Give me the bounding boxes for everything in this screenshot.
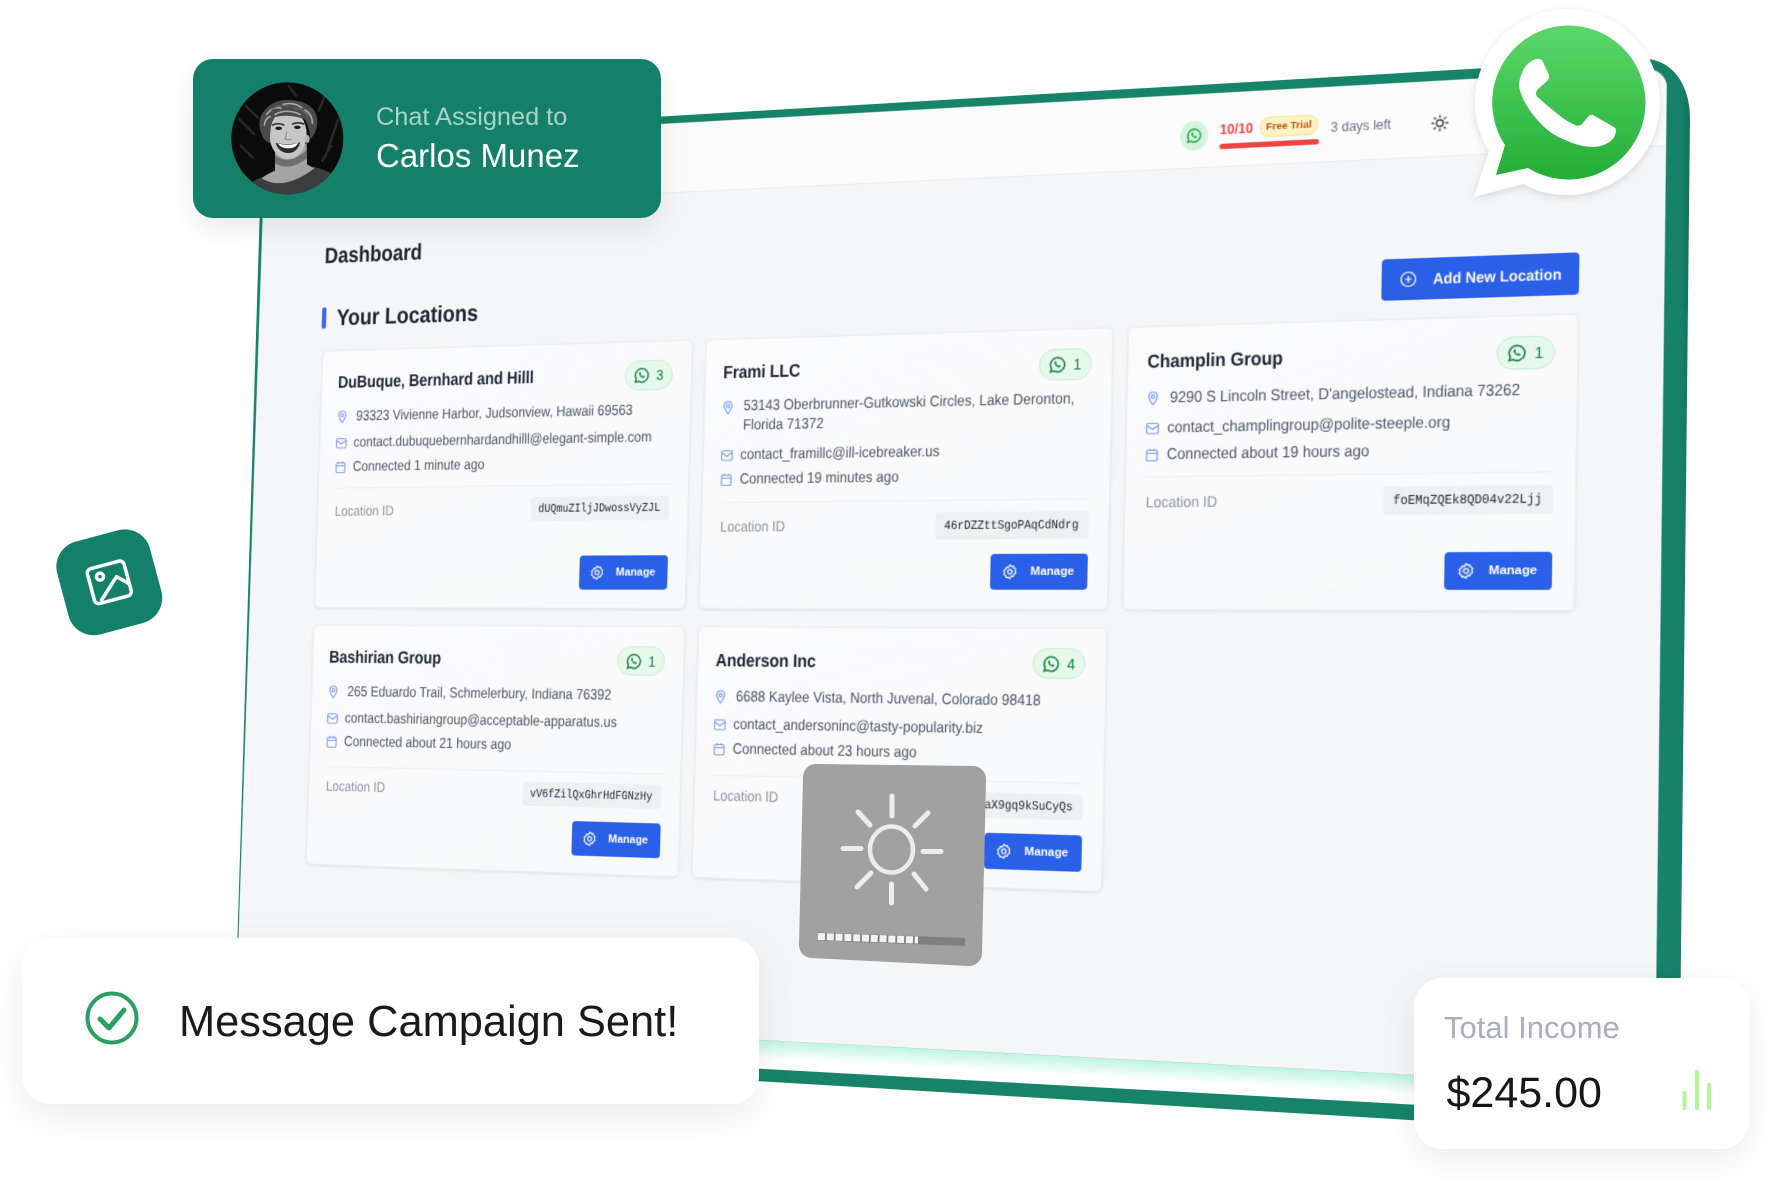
address: 53143 Oberbrunner-Gutkowski Circles, Lake Deronton, <box>743 391 1075 414</box>
location id label: Location ID <box>720 518 785 535</box>
whatsapp count badge: 1 <box>648 653 656 670</box>
email: contact.bashiriangroup@acceptable-apparatus.us <box>345 711 617 731</box>
header bar <box>263 68 1667 213</box>
assignee name: Carlos Munez <box>376 136 580 174</box>
email: contact_framillc@ill-icebreaker.us <box>740 444 940 463</box>
manage button <box>571 821 661 858</box>
dashboard screen <box>236 68 1667 1088</box>
card title: Champlin Group <box>1147 347 1283 372</box>
panel: location card Frami <box>699 327 1113 610</box>
location id value <box>1383 485 1553 515</box>
quota bar <box>1219 139 1319 149</box>
panel: location card DuBuque <box>314 340 693 609</box>
card: message campaign sent <box>22 938 759 1104</box>
email: contact_andersoninc@tasty-popularity.biz <box>733 717 983 737</box>
manage button <box>984 833 1082 872</box>
card: total income <box>1414 978 1749 1149</box>
manage button: Manage <box>1030 565 1074 578</box>
whatsapp count badge <box>1032 648 1086 679</box>
income amount: $245.00 <box>1446 1069 1602 1117</box>
icon: check circle <box>86 992 138 1044</box>
whatsapp status icon <box>1180 120 1208 151</box>
location id value <box>935 511 1089 540</box>
email: contact.dubuquebernhardandhilll@elegant-simple.com <box>353 429 652 451</box>
whatsapp count badge <box>1496 335 1555 370</box>
manage button: Manage <box>608 833 648 847</box>
location id value <box>530 496 670 521</box>
email: contact_champlingroup@polite-steeple.org <box>1167 414 1450 437</box>
location id value: bT2mLpQaX9gq9kSuCyQs <box>938 797 1073 815</box>
connected time: Connected about 19 hours ago <box>1167 443 1369 463</box>
icon: whatsapp logo <box>1472 8 1662 200</box>
address: Florida 71372 <box>743 416 824 434</box>
address <box>723 391 1075 434</box>
panel: location card Champlin <box>1122 314 1579 611</box>
income label: Total Income <box>1444 1010 1620 1045</box>
icon: image badge <box>56 529 162 636</box>
message text: Message Campaign Sent! <box>179 998 678 1046</box>
mini bar chart <box>1682 1070 1711 1110</box>
location id value <box>929 791 1083 820</box>
days left: 3 days left <box>1331 117 1391 135</box>
panel: location card Anderson <box>692 626 1107 892</box>
address: 93323 Vivienne Harbor, Judsonview, Hawaii 69563 <box>356 403 633 424</box>
message quota: 10/10 <box>1220 119 1253 137</box>
location id label: Location ID <box>326 779 385 796</box>
loading sun panel <box>799 764 986 966</box>
heading: your locations: Your Locations <box>336 300 478 330</box>
whatsapp count badge: 1 <box>1534 343 1544 361</box>
whatsapp count badge <box>625 359 673 391</box>
location id value <box>522 781 662 809</box>
connected time: Connected 19 minutes ago <box>739 469 899 488</box>
location id value: dUQmuZIljJDwossVyZJL <box>539 501 661 516</box>
manage button: Manage <box>1489 564 1537 578</box>
address: 9290 S Lincoln Street, D'angelostead, Indiana 73262 <box>1170 382 1520 407</box>
manage button <box>990 554 1088 590</box>
location id label: Location ID <box>713 788 778 806</box>
card: chat assigned <box>193 59 661 218</box>
card title: Frami LLC <box>723 360 801 382</box>
manage button: Manage <box>616 566 655 579</box>
manage button: Manage <box>1024 846 1068 860</box>
manage button <box>579 555 668 590</box>
whatsapp count badge <box>617 646 666 676</box>
icon: theme sun <box>1430 114 1450 132</box>
card title: DuBuque, Bernhard and Hilll <box>338 367 534 392</box>
chat label: Chat Assigned to <box>376 103 567 131</box>
whatsapp count badge: 4 <box>1067 656 1075 673</box>
connected time: Connected 1 minute ago <box>353 457 485 475</box>
panel: location card Bashirian <box>306 625 685 877</box>
card title: Anderson Inc <box>715 650 816 671</box>
avatar photo <box>231 82 344 194</box>
address: 6688 Kaylee Vista, North Juvenal, Colorado 98418 <box>736 688 1041 709</box>
button: add new location: Add New Location <box>1432 265 1561 287</box>
free trial pill: Free Trial <box>1266 119 1312 133</box>
whatsapp count badge: 1 <box>1073 356 1082 373</box>
whatsapp count badge <box>1039 348 1092 381</box>
free trial pill <box>1259 114 1318 138</box>
location id value: vV6fZilQxGhrHdFGNzHy <box>530 787 653 804</box>
card title: Bashirian Group <box>329 647 441 668</box>
connected time: Connected about 21 hours ago <box>344 734 511 753</box>
location id label: Location ID <box>335 504 394 520</box>
button: add new location <box>1381 252 1579 301</box>
whatsapp count badge: 3 <box>656 367 664 383</box>
manage button <box>1444 552 1552 590</box>
address: 265 Eduardo Trail, Schmelerbury, Indiana 76392 <box>347 684 612 703</box>
connected time: Connected about 23 hours ago <box>732 741 917 761</box>
heading: dashboard: Dashboard <box>324 239 422 268</box>
location id label: Location ID <box>1146 494 1217 512</box>
location id value: foEMqZQEk8QD04v22Ljj <box>1394 491 1543 508</box>
section accent bar <box>322 307 327 329</box>
location id value: 46rDZZttSgoPAqCdNdrg <box>944 518 1079 533</box>
